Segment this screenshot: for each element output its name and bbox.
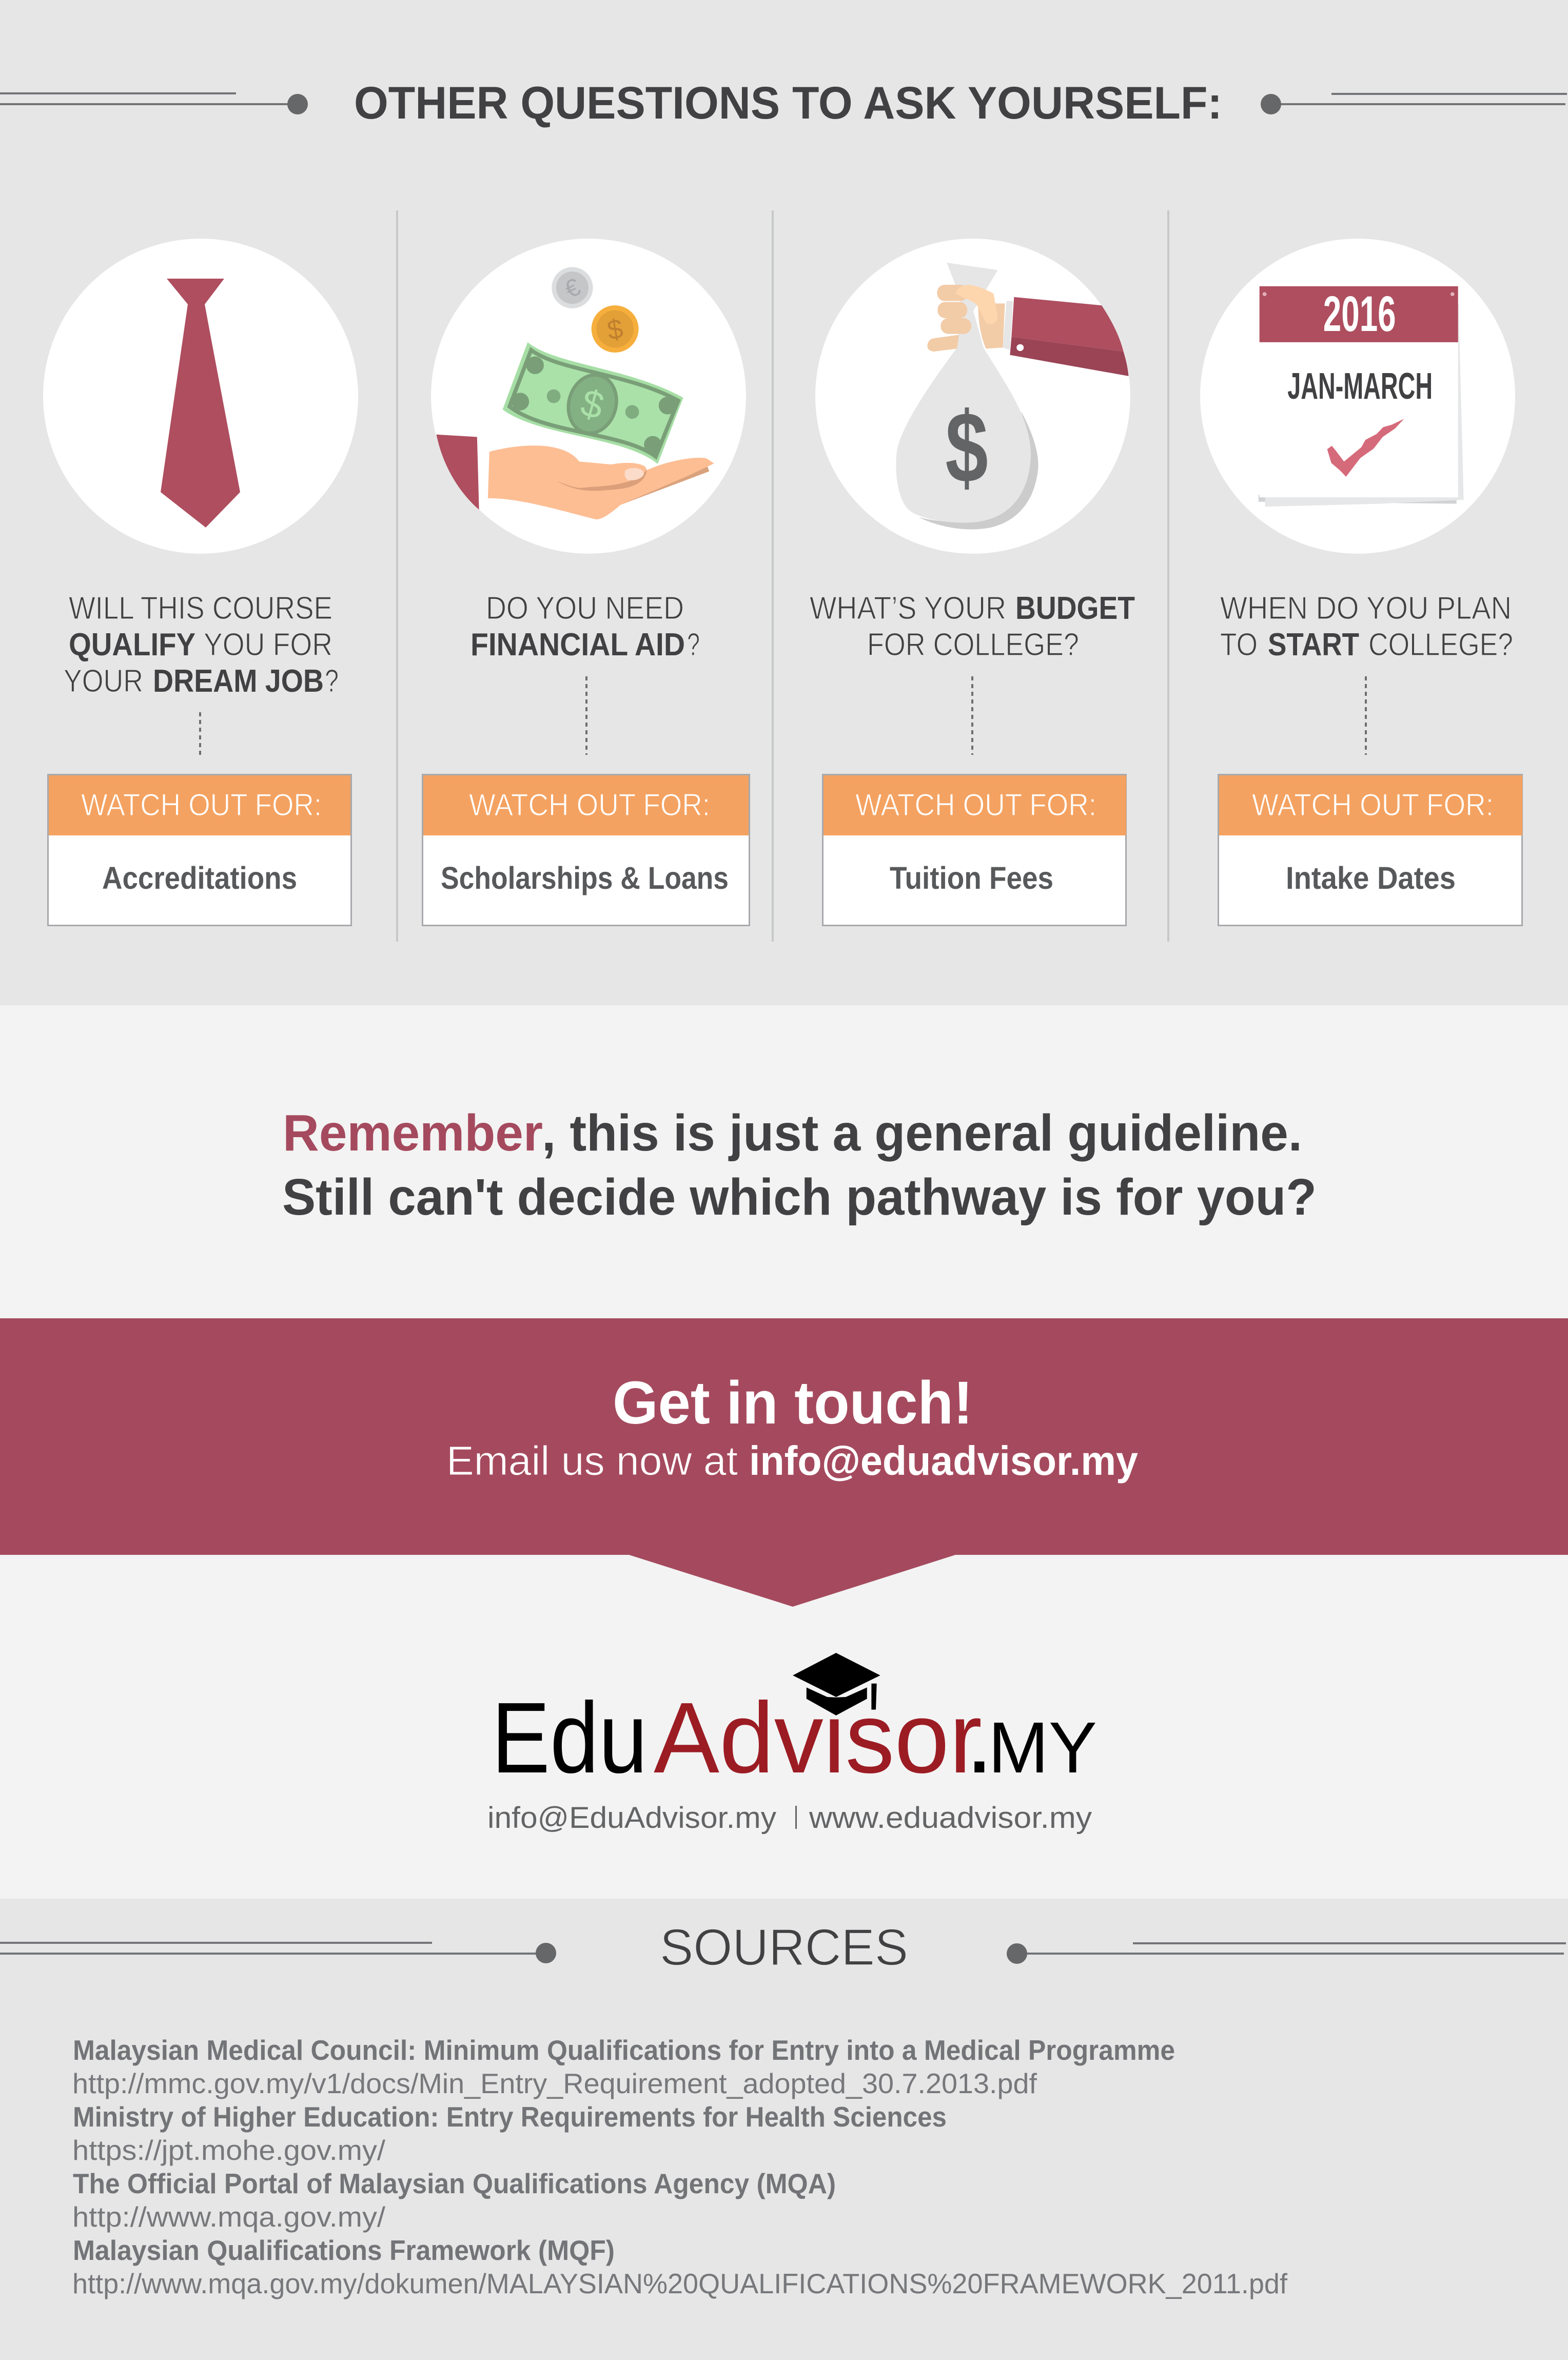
logo wordmark (492, 1680, 1097, 1795)
sources list: http://mmc.gov.my/v1/docs/Min_Entry_Requirement_adopted_30.7.2013.pdf (72, 2068, 1037, 2099)
background: light reminder section (0, 1005, 1568, 1899)
question text (810, 591, 1135, 662)
right rule with dot (1007, 1942, 1566, 1964)
watch out box: tuition fees: Tuition Fees (890, 861, 1053, 895)
question text (471, 591, 700, 662)
sources list (72, 2034, 1288, 2299)
check mark (1327, 419, 1404, 477)
icon: money bag held by hand (815, 239, 1130, 554)
sources list: Ministry of Higher Education: Entry Requirements for Health Sciences (73, 2101, 947, 2133)
background: grey sources section (0, 1899, 1568, 2360)
watch out box: accreditations (48, 775, 351, 926)
icon: sleeve (436, 435, 479, 510)
sources heading text: SOURCES (660, 1919, 908, 1976)
icon: silver coin: € (561, 274, 584, 304)
banner email line: Email us now at (446, 1438, 738, 1484)
banner heading: Get in touch! (613, 1369, 973, 1437)
reminder text: , this is just a general guideline. (542, 1104, 1302, 1162)
watch out box: intake dates: Intake Dates (1286, 861, 1456, 895)
icon: banknote: $ (577, 380, 609, 427)
logo: EduAdvisor.my (487, 1653, 1097, 1835)
icon: gold coin (592, 305, 639, 353)
panel: budget (810, 239, 1135, 926)
question text: WILL THIS COURSE (69, 591, 332, 626)
logo contact line (487, 1801, 1092, 1835)
question text: WHEN DO YOU PLAN (1220, 591, 1512, 626)
watch out box: scholarships (423, 775, 749, 926)
question text: BUDGET (1015, 591, 1135, 626)
question text: DREAM JOB (153, 664, 324, 699)
logo wordmark: . (965, 1680, 994, 1795)
heading text: OTHER QUESTIONS TO ASK YOURSELF: (354, 77, 1222, 128)
question text: FOR COLLEGE? (867, 627, 1079, 662)
calendar year: 2016 (1323, 286, 1396, 342)
logo wordmark: MY (988, 1707, 1097, 1788)
left rule with dot (0, 1942, 556, 1963)
icon: calendar (1200, 239, 1515, 554)
reminder text: Remember (283, 1104, 543, 1162)
icon: banknote (503, 342, 683, 464)
watch out box: tuition fees (823, 775, 1126, 926)
question text: COLLEGE? (1368, 627, 1513, 662)
cuff (1003, 301, 1013, 350)
banner email line (446, 1438, 1138, 1484)
sleeve (1011, 297, 1124, 352)
sources list: https://jpt.mohe.gov.my/ (72, 2134, 386, 2166)
icon: necktie (43, 239, 358, 554)
question text: DO YOU NEED (486, 591, 684, 626)
question text (1220, 591, 1513, 662)
logo wordmark: Advisor (654, 1682, 982, 1794)
sources list: The Official Portal of Malaysian Qualifications Agency (MQA) (73, 2168, 836, 2199)
panel: start date (1200, 239, 1522, 926)
sources list: Malaysian Medical Council: Minimum Qualifications for Entry into a Medical Programme (73, 2034, 1175, 2066)
banner email line: info@eduadvisor.my (749, 1438, 1138, 1484)
watch out box: intake dates (1218, 775, 1522, 926)
sources list: http://www.mqa.gov.my/dokumen/MALAYSIAN%20QUALIFICATIONS%20FRAMEWORK_2011.pdf (72, 2268, 1288, 2299)
heading: other questions (0, 77, 1567, 128)
question text: TO (1220, 627, 1258, 662)
question text: START (1268, 627, 1359, 662)
question text: FINANCIAL AID (471, 627, 685, 662)
reminder text: Still can't decide which pathway is for you? (282, 1168, 1317, 1226)
panel: dream job (43, 239, 358, 926)
thumb (955, 285, 998, 324)
logo contact line: www.eduadvisor.my (809, 1801, 1092, 1835)
icon: open hand (488, 445, 714, 519)
question text: ? (687, 627, 700, 662)
icon: silver coin (552, 267, 593, 308)
icon: money over hand (431, 239, 746, 554)
logo wordmark: Edu (492, 1682, 648, 1794)
reminder text (282, 1104, 1317, 1226)
fingers (927, 285, 1005, 352)
dollar sign: $ (945, 392, 988, 504)
contact banner (0, 1318, 1568, 1607)
heading: sources (0, 1919, 1566, 1976)
watch out box: accreditations: WATCH OUT FOR: (81, 788, 322, 822)
question text: YOU FOR (204, 627, 332, 662)
calendar months: JAN-MARCH (1287, 365, 1433, 407)
bag body (896, 263, 1031, 523)
question text (64, 591, 339, 699)
left rule with dot (0, 92, 308, 114)
right rule with dot (1261, 93, 1567, 114)
sources list: Malaysian Qualifications Framework (MQF) (73, 2234, 615, 2266)
question text: ? (325, 664, 339, 699)
question text: YOUR (64, 664, 143, 699)
sources list: http://www.mqa.gov.my/ (72, 2201, 386, 2233)
watch out box: scholarships: Scholarships & Loans (441, 861, 729, 895)
background: grey questions section (0, 0, 1568, 1005)
icon: graduation cap (790, 1653, 883, 1717)
watch out box: tuition fees: WATCH OUT FOR: (855, 788, 1096, 822)
logo contact line: info@EduAdvisor.my (487, 1801, 776, 1835)
watch out box: intake dates: WATCH OUT FOR: (1252, 788, 1494, 822)
watch out box: accreditations: Accreditations (102, 861, 297, 895)
question text: QUALIFY (69, 627, 195, 662)
watch out box: scholarships: WATCH OUT FOR: (469, 788, 710, 822)
question text: WHAT’S YOUR (810, 591, 1006, 626)
bag shadow (918, 411, 1038, 530)
panel: financial aid (423, 239, 749, 926)
icon: gold coin: $ (605, 314, 625, 346)
